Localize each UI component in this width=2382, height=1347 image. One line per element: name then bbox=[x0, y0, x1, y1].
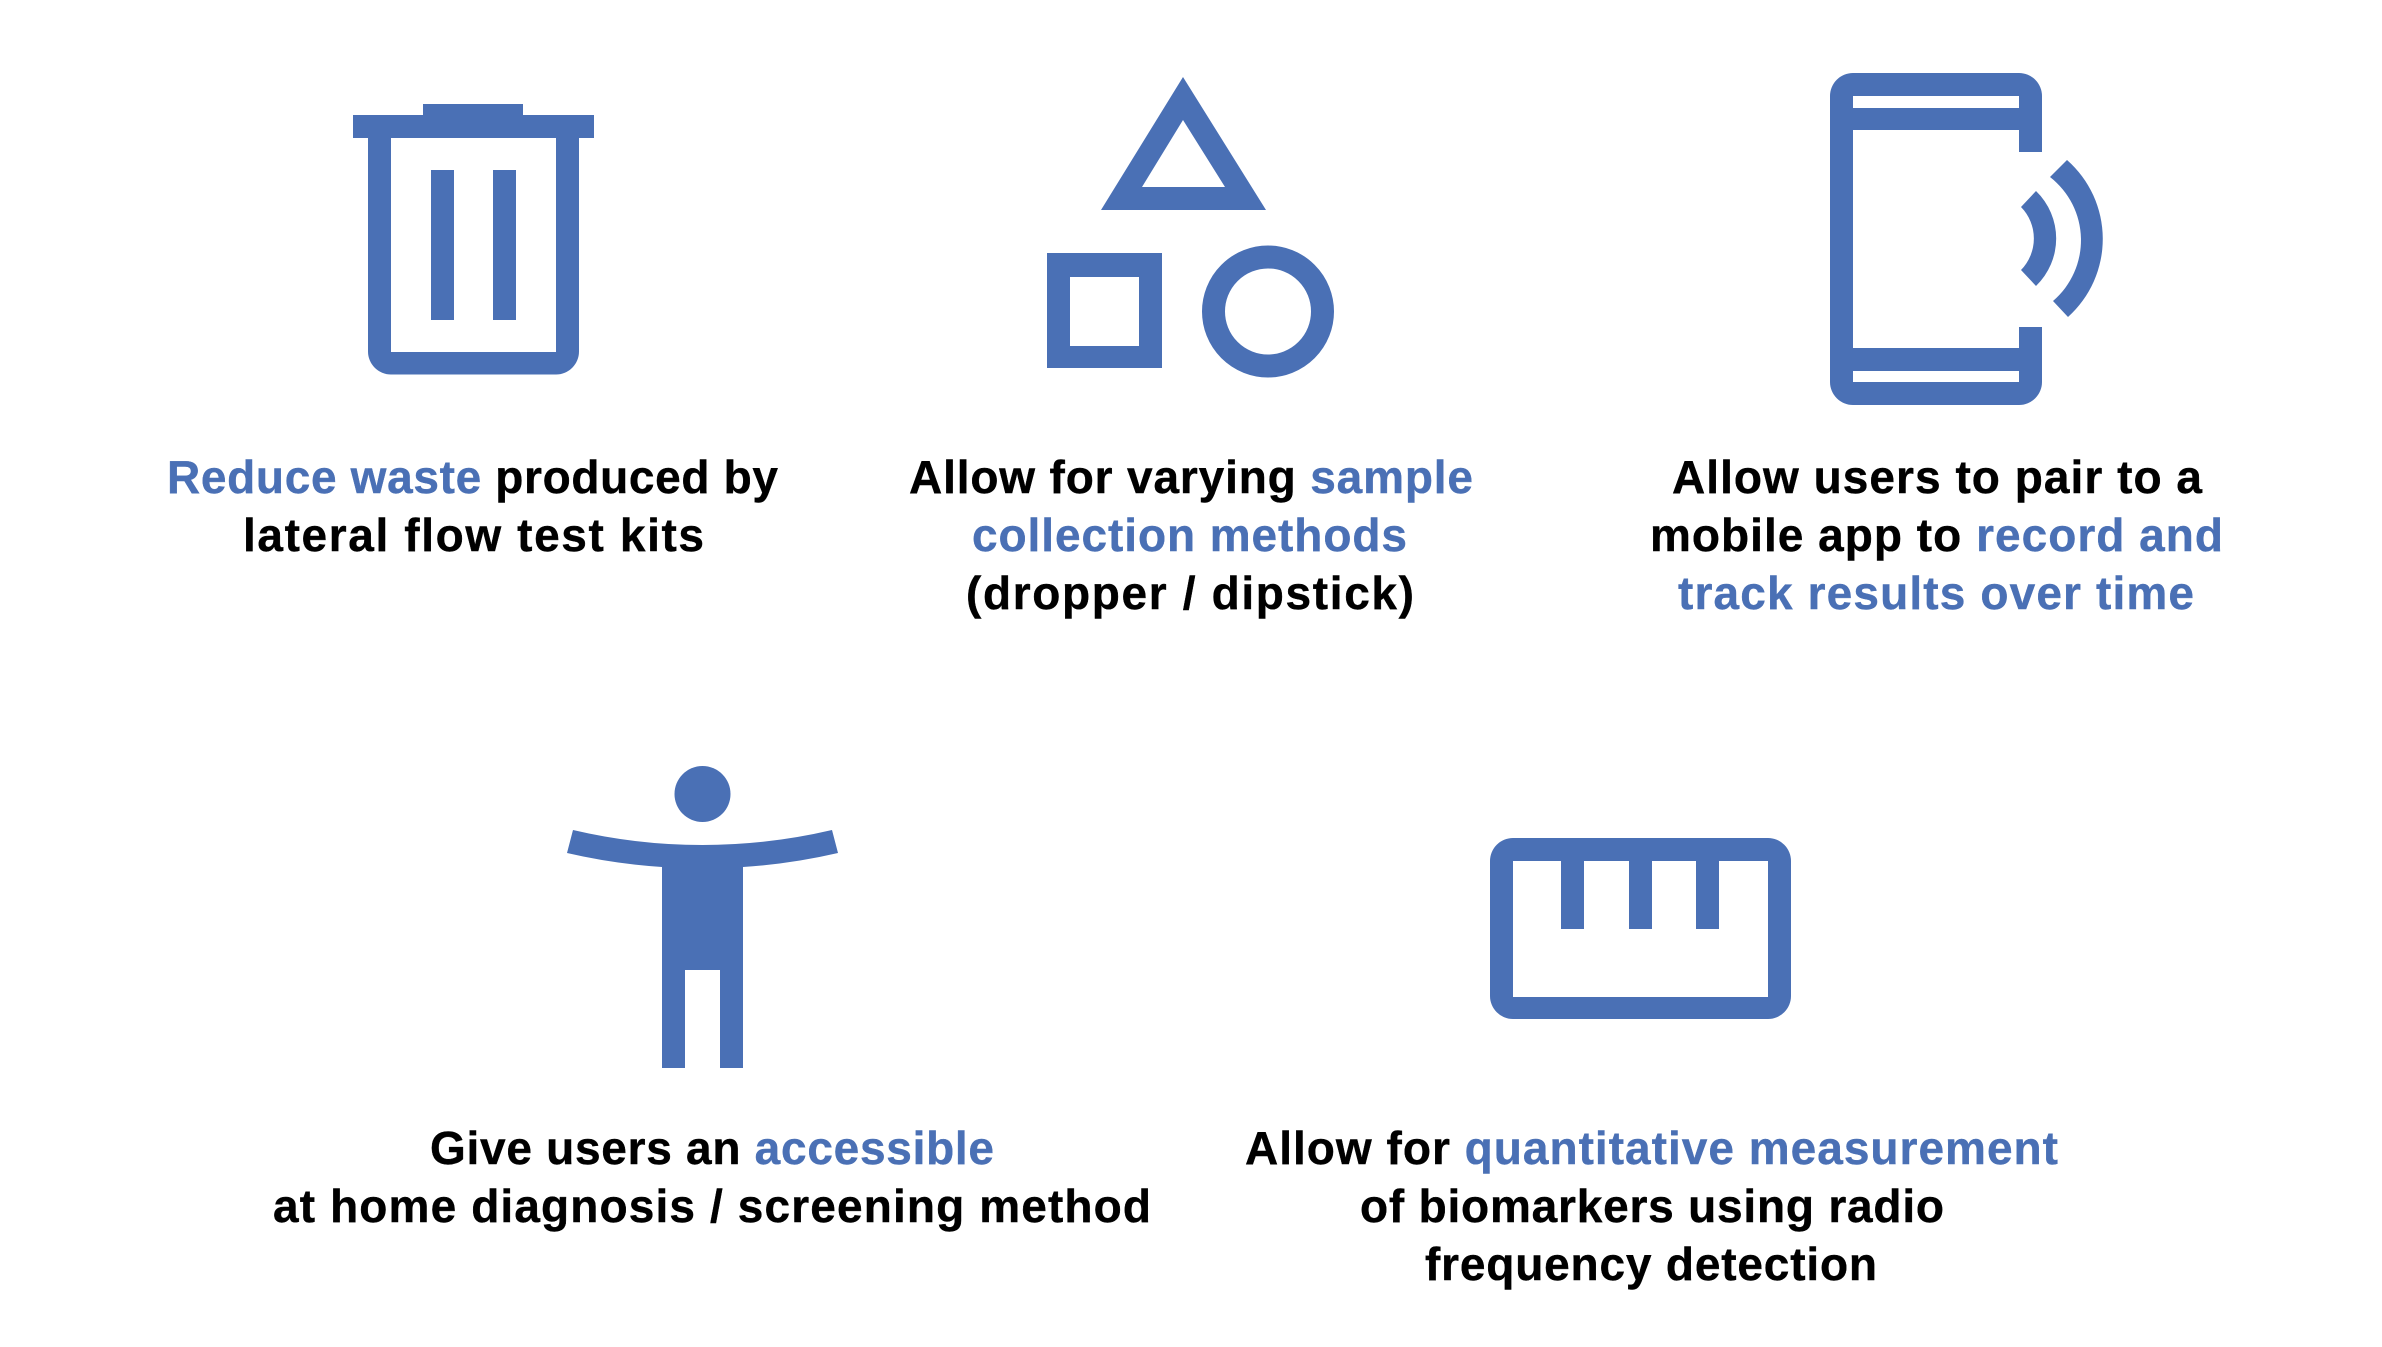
icon: person with open arms bbox=[567, 766, 838, 1068]
text: quantitative measurement: frequency detection bbox=[1425, 1238, 1877, 1290]
text: accessible diagnosis: Give users an accessible bbox=[430, 1122, 994, 1174]
text: reduce waste bbox=[167, 451, 778, 561]
text: sample collection: collection methods bbox=[972, 509, 1407, 561]
panel: reduce waste bbox=[167, 104, 778, 561]
text: quantitative measurement: of biomarkers using radio bbox=[1360, 1180, 1944, 1232]
panel: quantitative measurement bbox=[1245, 838, 2058, 1290]
icon: ruler bbox=[1490, 838, 1791, 1019]
text: reduce waste: lateral flow test kits bbox=[243, 509, 704, 561]
text: sample collection: (dropper / dipstick) bbox=[966, 567, 1414, 619]
text: sample collection: Allow for varying sample bbox=[909, 451, 1473, 503]
text: accessible diagnosis bbox=[273, 1122, 1151, 1232]
text: reduce waste: Reduce waste produced by bbox=[167, 451, 778, 503]
text: quantitative measurement bbox=[1245, 1122, 2058, 1290]
panel: sample collection bbox=[909, 77, 1473, 619]
text: mobile app: Allow users to pair to a bbox=[1672, 451, 2202, 503]
icon: phone with signal waves bbox=[1830, 73, 2103, 405]
text: quantitative measurement: Allow for quantitative measurement bbox=[1245, 1122, 2058, 1174]
text: mobile app: mobile app to record and bbox=[1650, 509, 2223, 561]
text: accessible diagnosis: at home diagnosis / screening method bbox=[273, 1180, 1151, 1232]
text: mobile app bbox=[1650, 451, 2223, 619]
panel: mobile app bbox=[1650, 73, 2223, 619]
icon: trash can bbox=[353, 104, 594, 374]
panel: accessible diagnosis bbox=[273, 766, 1151, 1232]
icon: triangle, square and circle bbox=[1047, 77, 1322, 368]
text: mobile app: track results over time bbox=[1678, 567, 2194, 619]
text: sample collection bbox=[909, 451, 1473, 619]
